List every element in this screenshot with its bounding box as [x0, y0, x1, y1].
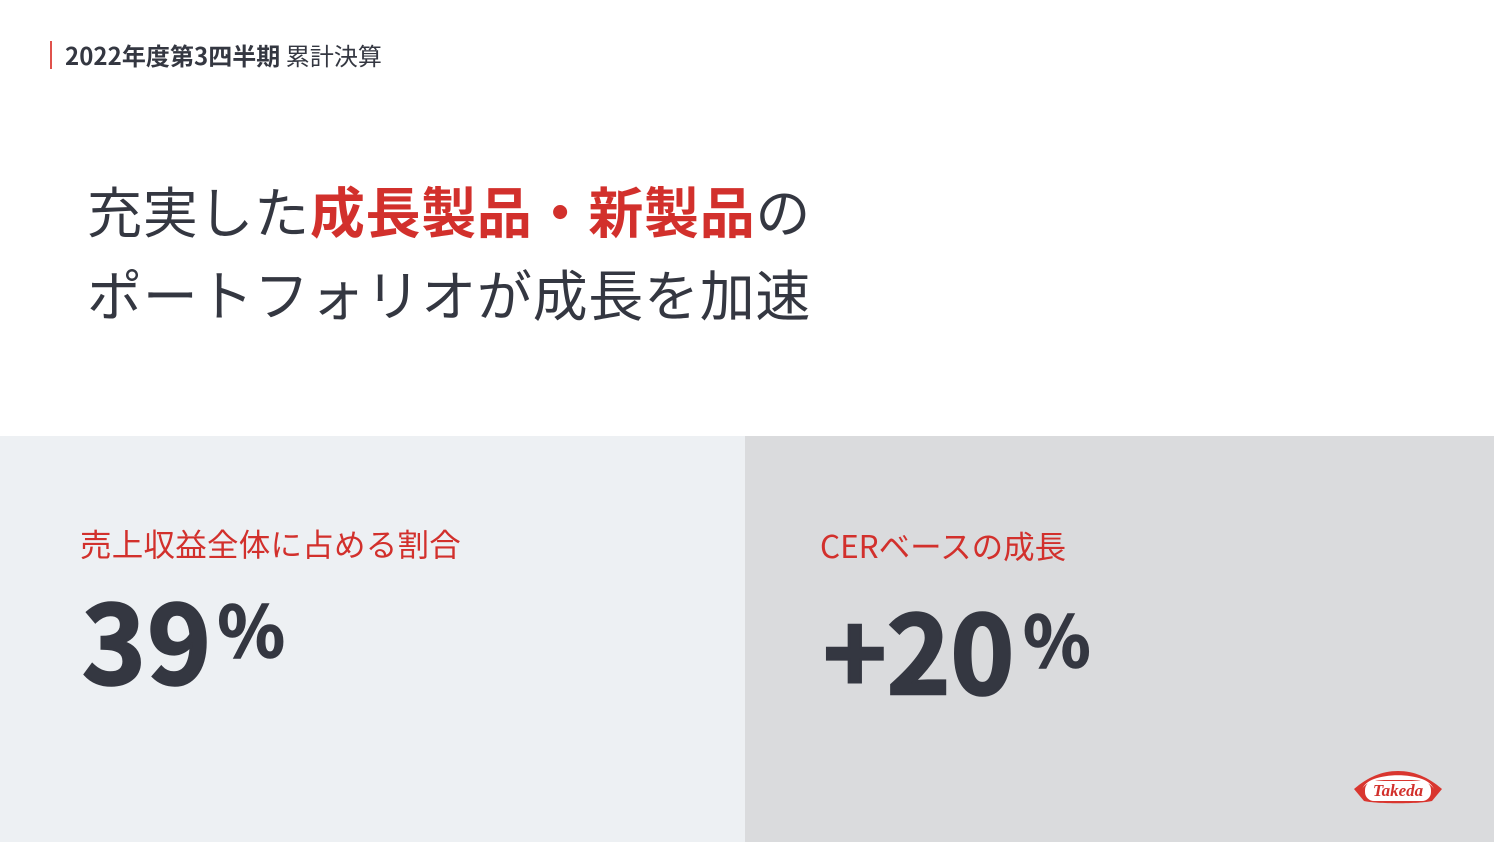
- main headline: [87, 169, 811, 332]
- growth label: CERベースの成長: [820, 522, 1066, 568]
- icon: Takeda logo: Takeda: [1373, 781, 1424, 800]
- header text: 2022年度第3四半期 累計決算: [65, 37, 382, 72]
- growth value: +20%: [823, 570, 1091, 726]
- panel: CER growth: [745, 436, 1494, 842]
- panel: share of revenue: [0, 436, 745, 842]
- share value: 39%: [82, 560, 285, 716]
- header accent bar: [50, 41, 52, 69]
- main headline: ポートフォリオが成長を加速: [87, 252, 811, 332]
- main headline: 充実した成長製品・新製品の: [87, 169, 811, 249]
- icon: Takeda logo: [1354, 771, 1442, 804]
- share label: 売上収益全体に占める割合: [80, 520, 461, 566]
